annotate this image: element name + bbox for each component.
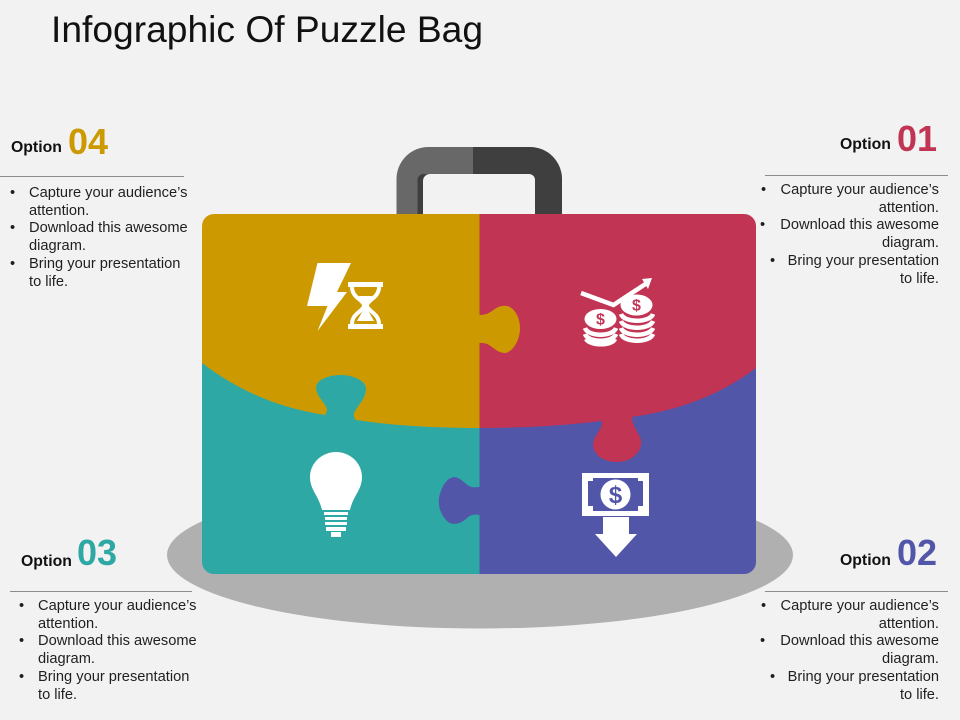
icon: lightning bolt and hourglass xyxy=(307,263,383,331)
text block: to life. xyxy=(900,687,939,703)
puzzle piece: teal xyxy=(202,340,480,574)
puzzle briefcase xyxy=(202,214,756,574)
text block: diagram. xyxy=(38,651,95,667)
heading xyxy=(840,118,937,159)
text block: Capture your audience’s xyxy=(781,182,939,198)
heading: Option xyxy=(11,139,62,156)
icon: coin stacks with trend line: $ xyxy=(632,298,641,314)
heading xyxy=(21,532,117,573)
icon: banknote with down arrow xyxy=(582,473,649,557)
title: Infographic Of Puzzle Bag xyxy=(51,8,483,50)
text block xyxy=(760,182,939,287)
text block: to life. xyxy=(29,274,68,290)
text block: to life. xyxy=(38,687,77,703)
heading: Option xyxy=(840,552,891,569)
text block: Bring your presentation xyxy=(788,669,939,685)
text block: Capture your audience’s xyxy=(781,598,939,614)
heading: 04 xyxy=(68,121,108,162)
bag handle xyxy=(396,147,562,216)
text block: • xyxy=(761,598,766,614)
heading: Option xyxy=(21,553,72,570)
text block: Download this awesome xyxy=(780,633,939,649)
panel: option 03 xyxy=(10,532,197,703)
text block: • xyxy=(19,598,24,614)
heading: Option xyxy=(840,136,891,153)
text block: diagram. xyxy=(882,651,939,667)
text block: attention. xyxy=(879,200,939,216)
heading: 01 xyxy=(897,118,937,159)
text block: Download this awesome xyxy=(38,633,197,649)
heading xyxy=(11,121,108,162)
puzzle piece: red xyxy=(479,214,756,462)
text block: • xyxy=(19,669,24,685)
text block: Download this awesome xyxy=(780,217,939,233)
icon: coin stacks with trend line: $ xyxy=(596,312,605,328)
heading: 03 xyxy=(77,532,117,573)
text block: to life. xyxy=(900,271,939,287)
shadow ellipse under bag xyxy=(167,482,793,628)
panel: option 04 xyxy=(0,121,188,290)
panel: option 02 xyxy=(760,532,948,703)
text block: Bring your presentation xyxy=(29,256,180,272)
text block: • xyxy=(770,253,775,269)
text block: diagram. xyxy=(882,235,939,251)
icon: coin stacks with trend line xyxy=(581,278,653,344)
heading xyxy=(840,532,937,573)
icon: banknote with down arrow: $ xyxy=(609,482,623,509)
text block: Capture your audience’s xyxy=(38,598,196,614)
text block: attention. xyxy=(879,616,939,632)
text block: • xyxy=(760,217,765,233)
text block: • xyxy=(19,633,24,649)
text block: Bring your presentation xyxy=(788,253,939,269)
panel: option 01 xyxy=(760,118,948,287)
text block: • xyxy=(760,633,765,649)
text block: • xyxy=(770,669,775,685)
text block xyxy=(760,598,939,703)
text block: attention. xyxy=(29,203,89,219)
puzzle piece: blue xyxy=(438,368,756,574)
icon: light bulb xyxy=(310,452,362,537)
heading: 02 xyxy=(897,532,937,573)
text block: • xyxy=(10,185,15,201)
text block: attention. xyxy=(38,616,98,632)
text block: • xyxy=(761,182,766,198)
text block xyxy=(19,598,197,703)
text block: • xyxy=(10,256,15,272)
text block: Bring your presentation xyxy=(38,669,189,685)
text block: Capture your audience’s xyxy=(29,185,187,201)
text block: diagram. xyxy=(29,238,86,254)
puzzle piece: gold xyxy=(202,214,520,428)
text block xyxy=(10,185,188,290)
text block: • xyxy=(10,220,15,236)
text block: Download this awesome xyxy=(29,220,188,236)
